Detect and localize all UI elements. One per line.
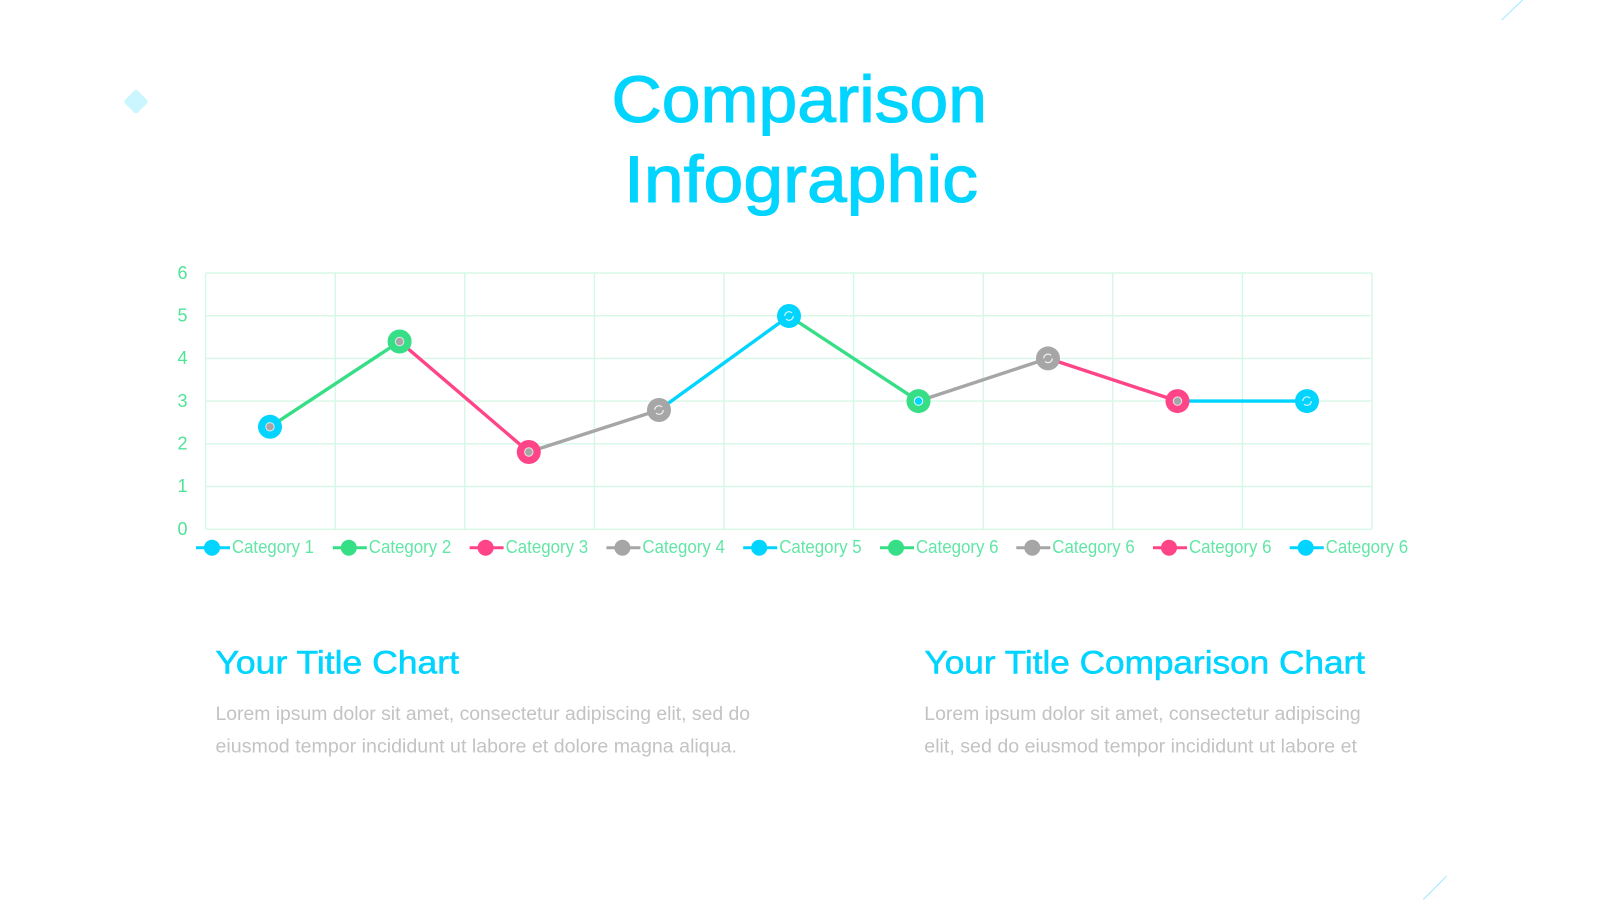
y axis labels: 0 bbox=[177, 519, 188, 539]
title: Comparison bbox=[612, 62, 987, 136]
y axis labels: 5 bbox=[177, 306, 188, 326]
data point 3 bbox=[517, 440, 541, 464]
right text block bbox=[924, 644, 1365, 758]
line chart bbox=[177, 263, 1372, 539]
y axis labels: 2 bbox=[177, 434, 188, 454]
data point 1 bbox=[258, 415, 282, 439]
right heading: Your Title Comparison Chart bbox=[924, 644, 1365, 680]
legend item: category 6 green: Category 6 bbox=[916, 537, 998, 557]
legend item: category 6 grey bbox=[1016, 537, 1135, 557]
legend item: category 6 cyan bbox=[1290, 537, 1408, 557]
legend item: category 6 pink: Category 6 bbox=[1189, 537, 1272, 557]
legend item: category 3: Category 3 bbox=[506, 537, 588, 557]
data point 9 bbox=[1295, 389, 1319, 413]
legend item: category 5: Category 5 bbox=[779, 537, 862, 557]
right paragraph: elit, sed do eiusmod tempor incididunt ut labore et bbox=[924, 737, 1358, 758]
right paragraph: Lorem ipsum dolor sit amet, consectetur adipiscing bbox=[924, 704, 1361, 725]
y axis labels bbox=[177, 263, 188, 539]
legend item: category 6 pink bbox=[1153, 537, 1272, 557]
data point 8 bbox=[1166, 389, 1190, 413]
y axis labels: 4 bbox=[177, 348, 188, 368]
title bbox=[612, 62, 987, 216]
left paragraph: Lorem ipsum dolor sit amet, consectetur adipiscing elit, sed do bbox=[216, 704, 750, 725]
legend item: category 3 bbox=[470, 537, 588, 557]
legend item: category 6 grey: Category 6 bbox=[1052, 537, 1135, 557]
legend item: category 2: Category 2 bbox=[369, 537, 451, 557]
legend item: category 4 bbox=[606, 537, 725, 557]
line segments bbox=[270, 316, 1307, 452]
legend item: category 6 green bbox=[880, 537, 998, 557]
data point 7 bbox=[1036, 346, 1060, 370]
title: Infographic bbox=[624, 142, 978, 216]
legend item: category 1 bbox=[196, 537, 314, 557]
legend item: category 4: Category 4 bbox=[642, 537, 725, 557]
data point 4 bbox=[647, 398, 671, 422]
legend bbox=[196, 537, 1408, 557]
legend item: category 6 cyan: Category 6 bbox=[1326, 537, 1408, 557]
data point 5 bbox=[777, 304, 801, 328]
decorative diamond bbox=[123, 89, 149, 114]
legend item: category 2 bbox=[333, 537, 451, 557]
left heading: Your Title Chart bbox=[216, 644, 459, 680]
left paragraph: eiusmod tempor incididunt ut labore et dolore magna aliqua. bbox=[216, 737, 737, 758]
right paragraph bbox=[924, 704, 1361, 758]
legend item: category 1: Category 1 bbox=[232, 537, 314, 557]
y axis labels: 3 bbox=[177, 391, 188, 411]
decorative line top right bbox=[1502, 0, 1523, 20]
left paragraph bbox=[216, 704, 750, 758]
y axis labels: 6 bbox=[177, 263, 188, 283]
legend item: category 5 bbox=[743, 537, 862, 557]
y axis labels: 1 bbox=[177, 476, 188, 496]
left text block bbox=[216, 644, 750, 758]
data point 6 bbox=[906, 389, 930, 413]
data point 2 bbox=[388, 330, 412, 354]
decorative line bottom right bbox=[1423, 876, 1447, 900]
